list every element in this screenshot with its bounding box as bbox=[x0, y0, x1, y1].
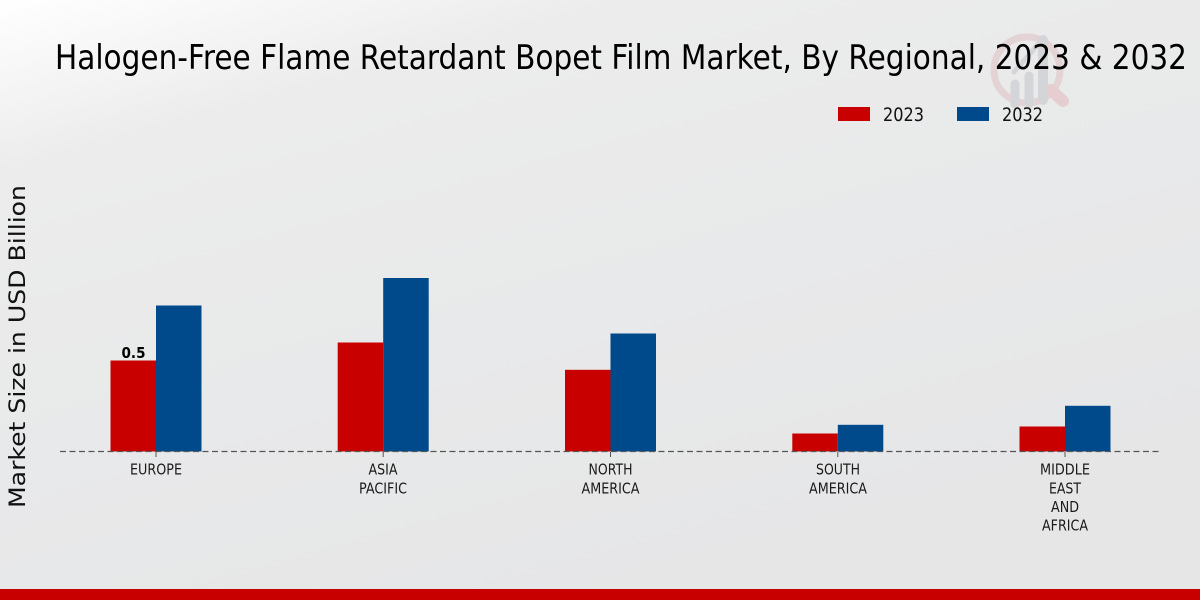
label: Asia Pacific: ASIA bbox=[368, 460, 398, 478]
bars: Europe bbox=[110, 306, 202, 452]
label: North America bbox=[582, 460, 640, 498]
bars: South America bbox=[792, 425, 883, 452]
label: South America bbox=[809, 460, 867, 498]
legend bbox=[838, 104, 1043, 126]
legend: 2023: 2023 bbox=[883, 104, 924, 126]
y axis label: Market Size in USD Billion bbox=[5, 185, 31, 508]
icon: watermark magnifier logo bbox=[994, 37, 1063, 104]
label: Middle East and Africa: AFRICA bbox=[1042, 516, 1088, 534]
footer bar bbox=[0, 589, 1200, 600]
bars: Asia Pacific bbox=[338, 278, 429, 452]
label: Asia Pacific bbox=[359, 460, 407, 498]
label: South America: SOUTH bbox=[816, 460, 860, 478]
category labels bbox=[130, 460, 1090, 534]
label: Middle East and Africa bbox=[1040, 460, 1090, 534]
label: North America: NORTH bbox=[588, 460, 632, 478]
bars: Middle East and Africa bbox=[1020, 406, 1110, 452]
label: South America: AMERICA bbox=[809, 480, 867, 498]
legend: 2023 bbox=[838, 104, 924, 126]
label: Europe: EUROPE bbox=[130, 460, 182, 478]
label: Middle East and Africa: AND bbox=[1051, 498, 1079, 516]
bars: North America bbox=[565, 334, 656, 452]
label: North America: AMERICA bbox=[582, 480, 640, 498]
bar chart bbox=[60, 278, 1160, 457]
legend: 2032 bbox=[957, 104, 1043, 126]
axis ticks bbox=[156, 452, 1065, 457]
data label: 0.5 bbox=[122, 344, 146, 362]
label: Asia Pacific: PACIFIC bbox=[359, 480, 407, 498]
baseline bbox=[60, 450, 1160, 452]
label: Middle East and Africa: MIDDLE bbox=[1040, 460, 1090, 478]
legend: 2032: 2032 bbox=[1002, 104, 1043, 126]
label: Middle East and Africa: EAST bbox=[1049, 480, 1081, 498]
